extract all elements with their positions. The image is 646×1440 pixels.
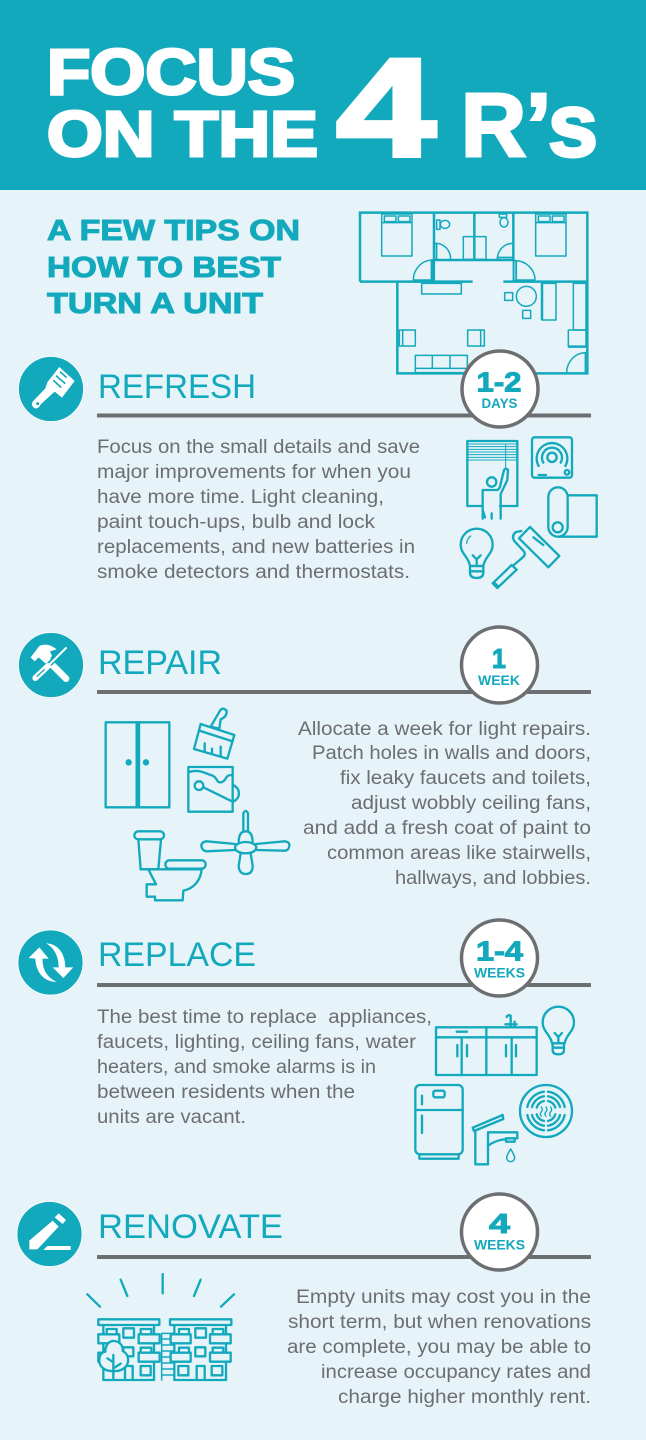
body text: [97, 1007, 432, 1128]
icon: thermostat: [532, 437, 572, 478]
body text: and add a fresh coat of paint to: [303, 818, 591, 839]
section: repair: [18, 627, 591, 900]
body text: between residents when the: [97, 1082, 355, 1103]
body text: The best time to replace appliances,: [97, 1007, 432, 1028]
body text: are complete, you may be able to: [287, 1337, 591, 1358]
icon: smoke alarm: [520, 1085, 572, 1137]
rule: [97, 983, 591, 987]
icon: kitchen cabinet and sink: [436, 1015, 537, 1075]
icon: pencil: [17, 1202, 82, 1266]
heading: renovate: RENOVATE: [98, 1208, 283, 1246]
title: ON THE: [47, 98, 318, 170]
icon: light bulb: [461, 529, 493, 578]
duration badge: 1-2 days: DAYS: [482, 396, 518, 411]
floor plan illustration: [360, 213, 587, 373]
duration badge: 4 weeks: [462, 1194, 538, 1270]
rule: [97, 1255, 591, 1259]
subtitle: HOW TO BEST: [47, 252, 281, 284]
duration badge: 4 weeks: 4: [489, 1208, 511, 1239]
body text: major improvements for when you: [97, 462, 411, 483]
title: FOCUS: [47, 36, 295, 108]
header banner: [0, 0, 646, 190]
icon: apartment building with rays: [87, 1274, 234, 1380]
title: [47, 29, 598, 186]
body text: hallways, and lobbies.: [395, 868, 591, 889]
heading: repair: REPAIR: [98, 644, 222, 682]
section: replace: [18, 920, 591, 1164]
heading: replace: REPLACE: [98, 936, 256, 974]
icon: light bulb: [543, 1007, 574, 1054]
body text: [287, 1287, 591, 1408]
duration badge: 1 week: WEEK: [478, 673, 520, 688]
duration badge: 1-2 days: [462, 351, 538, 427]
body text: Allocate a week for light repairs.: [298, 719, 591, 740]
duration badge: 1-4 weeks: 1-4: [476, 936, 523, 966]
body text: [298, 719, 591, 889]
subtitle: TURN A UNIT: [47, 288, 263, 320]
subtitle: [47, 215, 300, 320]
body text: heaters, and smoke alarms is in: [97, 1057, 376, 1078]
body text: Focus on the small details and save: [97, 437, 420, 458]
body text: short term, but when renovations: [288, 1312, 591, 1333]
body text: faucets, lighting, ceiling fans, water: [97, 1032, 417, 1053]
icon: window blinds and person: [467, 441, 517, 519]
duration badge: 1-4 weeks: [462, 920, 538, 996]
body text: have more time. Light cleaning,: [97, 487, 384, 508]
title: 4: [336, 29, 436, 186]
icon: ceiling fan: [201, 811, 289, 874]
icons: repair items: [106, 709, 289, 900]
icon: paint brush: [18, 356, 84, 422]
body text: common areas like stairwells,: [327, 843, 591, 864]
duration badge: 1 week: [462, 627, 538, 703]
duration badge: 1 week: 1: [492, 643, 506, 674]
body text: units are vacant.: [97, 1107, 246, 1128]
icon: hammer and screwdriver: [18, 632, 84, 698]
icon: double door wardrobe: [106, 722, 169, 807]
icon: paint bucket: [188, 767, 239, 812]
body text: charge higher monthly rent.: [338, 1387, 591, 1408]
body text: adjust wobbly ceiling fans,: [351, 793, 591, 814]
title: R’s: [461, 76, 598, 176]
icons: replace items: [415, 1007, 574, 1164]
icon: faucet and drop: [473, 1115, 517, 1164]
body text: increase occupancy rates and: [321, 1362, 591, 1383]
body text: smoke detectors and thermostats.: [97, 562, 410, 583]
body text: Patch holes in walls and doors,: [312, 743, 591, 764]
icons: refresh items: [461, 437, 597, 588]
section: renovate: [17, 1194, 591, 1408]
section: refresh: [18, 351, 597, 588]
subtitle: A FEW TIPS ON: [47, 215, 300, 247]
icon: paint roller: [493, 527, 559, 588]
icon: toilet: [134, 831, 206, 900]
body text: fix leaky faucets and toilets,: [340, 768, 591, 789]
rule: [97, 690, 591, 694]
duration badge: 1-4 weeks: WEEKS: [474, 966, 525, 980]
body text: Empty units may cost you in the: [296, 1287, 591, 1308]
body text: paint touch-ups, bulb and lock: [97, 512, 376, 533]
rule: [97, 414, 591, 418]
icon: replace arrows: [18, 930, 83, 995]
body text: [97, 437, 420, 583]
heading: refresh: REFRESH: [98, 368, 256, 406]
body text: replacements, and new batteries in: [97, 537, 415, 558]
icon: refrigerator: [415, 1085, 463, 1159]
icon: paint brush: [194, 709, 234, 759]
icon: wallpaper roll: [548, 487, 597, 537]
duration badge: 4 weeks: WEEKS: [474, 1238, 525, 1252]
duration badge: 1-2 days: 1-2: [476, 366, 522, 398]
